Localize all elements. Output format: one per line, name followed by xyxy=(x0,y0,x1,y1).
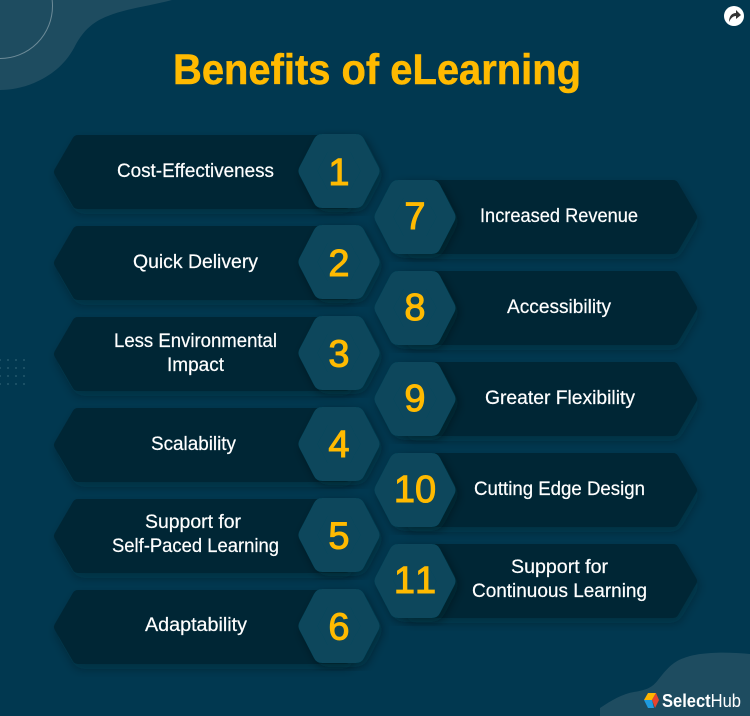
badge 1: 1 xyxy=(328,152,350,194)
item 3: Less Environmental Impact: Less Environmental xyxy=(114,331,277,352)
background blob: top left xyxy=(0,0,172,90)
badge 1 xyxy=(308,143,370,199)
item 3: Less Environmental Impact xyxy=(60,323,345,385)
badge 10: 10 xyxy=(394,469,436,511)
item 4: Scalability xyxy=(60,414,345,476)
badge 2 xyxy=(308,234,370,290)
item 11: Support for Continuous Learning: Continuous Learning xyxy=(472,581,647,602)
dot grid xyxy=(0,359,25,385)
badge 11: 11 xyxy=(394,560,436,602)
item 3: Less Environmental Impact: Impact xyxy=(167,355,225,376)
item 5: Support for Self-Paced Learning: Support for xyxy=(145,512,242,533)
badge 8: 8 xyxy=(404,287,426,329)
item 10: Cutting Edge Design: Cutting Edge Design xyxy=(474,479,645,500)
item 10: Cutting Edge Design xyxy=(410,459,691,521)
badge 6 xyxy=(308,598,370,654)
badge 2: 2 xyxy=(328,243,350,285)
item 11: Support for Continuous Learning xyxy=(410,550,691,612)
item 5: Support for Self-Paced Learning: Self-Paced Learning xyxy=(112,536,279,557)
badge 3 xyxy=(308,325,370,381)
item 5: Support for Self-Paced Learning xyxy=(60,505,345,567)
badge 4: 4 xyxy=(328,424,350,466)
item 4: Scalability: Scalability xyxy=(151,434,236,455)
badge 4 xyxy=(308,416,370,472)
badge 5 xyxy=(308,507,370,563)
item 1: Cost-Effectiveness xyxy=(60,141,345,203)
badge 7 xyxy=(384,189,446,245)
title: Benefits of eLearning xyxy=(173,46,581,94)
badge 10 xyxy=(384,462,446,518)
item 2: Quick Delivery: Quick Delivery xyxy=(133,252,258,273)
badge 3: 3 xyxy=(328,334,350,376)
item 6: Adaptability: Adaptability xyxy=(145,615,248,636)
badge 9: 9 xyxy=(404,378,426,420)
item 9: Greater Flexibility xyxy=(410,368,691,430)
item 7: Increased Revenue: Increased Revenue xyxy=(480,206,638,227)
item 6: Adaptability xyxy=(60,596,345,658)
background blob: bottom right xyxy=(600,653,750,716)
item 1: Cost-Effectiveness: Cost-Effectiveness xyxy=(117,161,274,182)
logo: SelectHub: SelectHub xyxy=(662,691,741,711)
item 9: Greater Flexibility: Greater Flexibility xyxy=(485,388,635,409)
item 11: Support for Continuous Learning: Support for xyxy=(511,557,609,578)
badge 6: 6 xyxy=(328,606,350,648)
badge 8 xyxy=(384,280,446,336)
badge 11 xyxy=(384,553,446,609)
badge 5: 5 xyxy=(328,516,350,558)
item 8: Accessibility xyxy=(410,277,691,339)
decorative circle outline xyxy=(0,0,52,58)
icon: share xyxy=(724,6,744,26)
item 7: Increased Revenue xyxy=(410,186,691,248)
badge 9 xyxy=(384,371,446,427)
badge 7: 7 xyxy=(404,196,426,238)
item 2: Quick Delivery xyxy=(60,232,345,294)
item 8: Accessibility: Accessibility xyxy=(507,297,611,318)
